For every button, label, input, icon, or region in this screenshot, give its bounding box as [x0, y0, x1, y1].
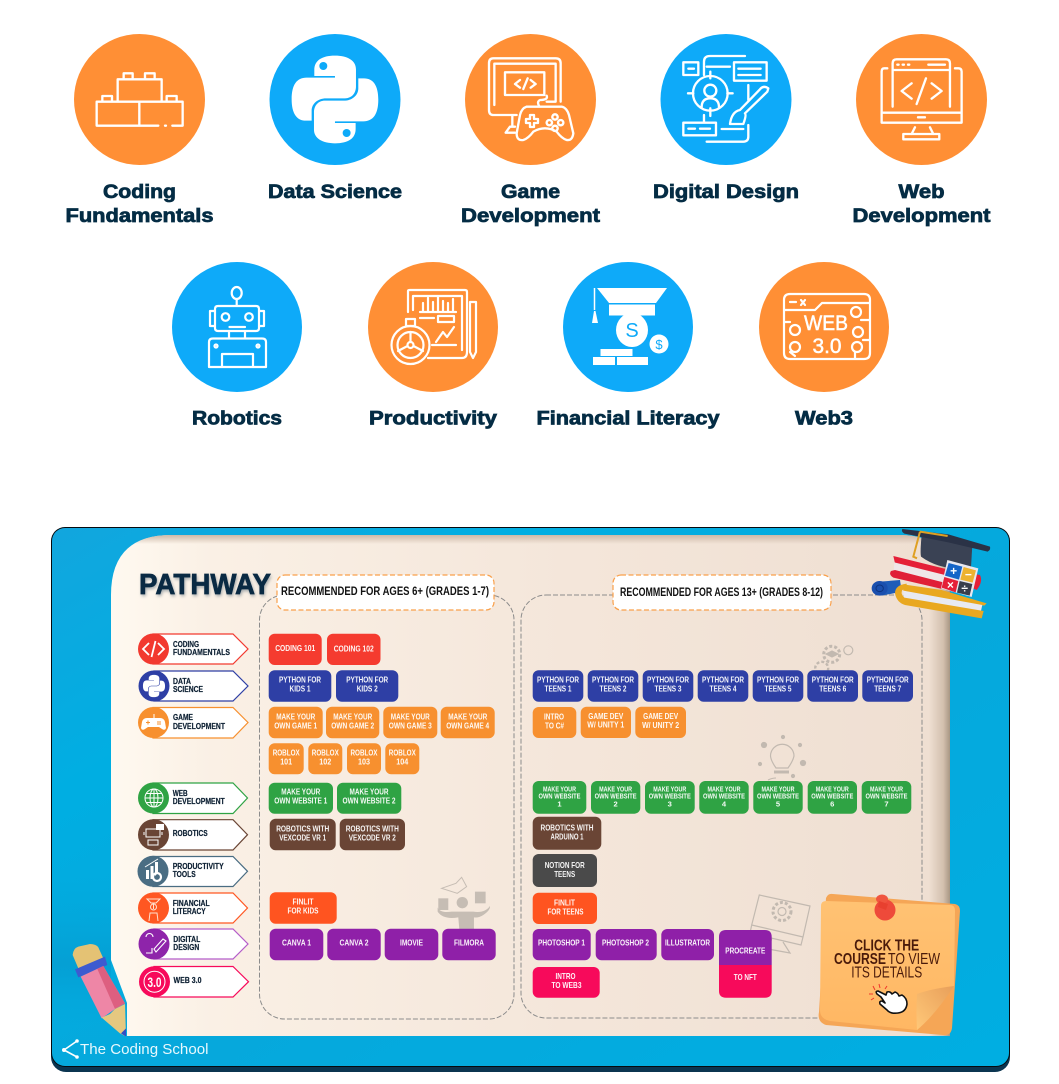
course: Make Your Own Game 2: OWN GAME 2: [331, 720, 374, 730]
course: Python for Teens 1: [533, 670, 583, 702]
icon: graduation cap and coins: [592, 288, 668, 365]
course: Canva 1: CANVA 1: [282, 938, 311, 948]
course: Roblox 102: [308, 743, 342, 774]
course: Make Your Own Website 1 (teens): OWN WEBSITE: [538, 792, 580, 801]
course: Roblox 104: [385, 743, 419, 774]
course: Make Your Own Game 2: [326, 707, 379, 738]
course: Coding 102: [327, 634, 380, 665]
group frame: ages 6+: [260, 595, 514, 1019]
legend: game development: GAME: [173, 713, 194, 722]
icon: robot: [209, 287, 266, 367]
call to action text: TO VIEW: [888, 951, 941, 968]
course: Roblox 103: 103: [358, 757, 370, 767]
icon: graduation cap and coins: S: [625, 320, 639, 342]
course: Make Your Own Website 2: [337, 783, 401, 814]
course: Roblox 104: ROBLOX: [389, 748, 416, 758]
heading: ages 6+: RECOMMENDED FOR AGES 6+ (GRADES 1-7): [281, 584, 489, 598]
course: Python for Teens 1: TEENS 1: [544, 684, 572, 694]
course: Roblox 102: 102: [319, 757, 332, 767]
course: Make Your Own Game 3: [383, 707, 437, 738]
course: Canva 2: [327, 929, 381, 960]
course: Make Your Own Website 7 (teens): [862, 781, 911, 814]
course: Make Your Own Website 5 (teens): MAKE YOUR: [762, 784, 795, 793]
label: Web: [898, 182, 944, 203]
course: Illustrator: ILLUSTRATOR: [665, 938, 710, 948]
course: Make Your Own Website 2: MAKE YOUR: [350, 787, 388, 797]
course: Python for Kids 1: [269, 670, 331, 702]
logo: The Coding School: The Coding School: [80, 1041, 208, 1058]
course: Make Your Own Game 1: OWN GAME 1: [274, 720, 317, 730]
category: Web3: [759, 262, 889, 430]
icon: web 3.0 window: WEB: [804, 312, 848, 335]
calculator: ×: [947, 578, 954, 592]
course: Make Your Own Website 2 (teens): [591, 781, 640, 814]
scroll: [872, 580, 902, 596]
course: Python for Teens 7: TEENS 7: [874, 684, 901, 694]
label: Web3: [795, 408, 853, 430]
legend: web development: DEVELOPMENT: [173, 797, 225, 806]
legend: coding fundamentals: CODING: [173, 640, 199, 649]
course: Robotics with VEXcode VR 1: ROBOTICS WITH: [276, 823, 329, 833]
legend: productivity tools: PRODUCTIVITY: [173, 862, 224, 871]
course: Make Your Own Website 4 (teens): MAKE YOUR: [708, 784, 741, 793]
course: Make Your Own Website 7 (teens): OWN WEBSITE: [866, 792, 908, 801]
course: Roblox 102: ROBLOX: [312, 748, 339, 758]
course: Robotics with Arduino 1: ARDUINO 1: [550, 831, 584, 841]
course: Filmora: FILMORA: [454, 938, 484, 948]
course: Python for Teens 3: [643, 670, 693, 702]
course: Intro to C#: INTRO: [544, 712, 564, 722]
course: Make Your Own Website 4 (teens): OWN WEBSITE: [703, 792, 745, 801]
course: Intro to Web3: TO WEB3: [552, 980, 582, 990]
course: Procreate to NFT: PROCREATE: [725, 945, 766, 955]
course: Make Your Own Website 4 (teens): [699, 781, 749, 814]
label: [66, 182, 214, 227]
watermark: light bulb: [758, 736, 806, 780]
course: Make Your Own Website 1 (teens): [533, 781, 586, 814]
label: [852, 182, 991, 227]
yellow book: [895, 584, 987, 618]
course: Python for Teens 6: TEENS 6: [819, 684, 846, 694]
category: Game Development: [461, 34, 601, 227]
course: Python for Teens 4: [698, 670, 748, 702]
course: Make Your Own Website 1: MAKE YOUR: [281, 787, 320, 797]
icon: monitor and controller: [489, 58, 573, 140]
course: Robotics with Arduino 1: [533, 817, 601, 850]
course: Make Your Own Website 1: [269, 783, 333, 814]
course: Make Your Own Game 1: MAKE YOUR: [276, 712, 315, 722]
course: Make Your Own Website 7 (teens): MAKE YOUR: [870, 784, 903, 793]
category: Coding Fundamentals: [66, 34, 214, 227]
course: Make Your Own Game 3: MAKE YOUR: [391, 712, 430, 722]
course: Make Your Own Game 3: OWN GAME 3: [389, 720, 432, 730]
icon: pointing hand: [869, 984, 907, 1013]
course: Game Dev with Unity 2: W/ UNITY 2: [642, 720, 679, 730]
category: Digital Design: [653, 34, 799, 203]
course: FinLit for Teens: FINLIT: [554, 897, 576, 907]
label: Financial Literacy: [536, 408, 720, 430]
course: Procreate to NFT: [719, 930, 772, 998]
course: Intro to Web3: [533, 967, 600, 998]
course: Canva 2: CANVA 2: [340, 938, 369, 948]
legend: digital design: [138, 928, 248, 960]
category: Web Development: [852, 34, 991, 227]
course: Notion for Teens: [533, 854, 597, 887]
course: Make Your Own Website 3 (teens): MAKE YOUR: [653, 784, 687, 793]
red books: [890, 556, 981, 590]
course: Robotics with VEXcode VR 1: VEXCODE VR 1: [279, 832, 326, 842]
course: Python for Kids 1: KIDS 1: [290, 684, 311, 694]
course: Python for Teens 5: [753, 670, 803, 702]
course: Make Your Own Website 1 (teens): 1: [557, 799, 562, 808]
course: Python for Teens 5: TEENS 5: [764, 684, 792, 694]
course: Game Dev with Unity 2: GAME DEV: [643, 711, 678, 721]
course: Photoshop 2: [596, 929, 657, 960]
course: Python for Kids 2: PYTHON FOR: [346, 675, 388, 685]
label: Development: [461, 206, 601, 227]
course: Notion for Teens: TEENS: [554, 869, 575, 879]
label: [461, 182, 601, 227]
panel: pathway: [51, 527, 1010, 1072]
label: Digital Design: [653, 182, 799, 203]
course: iMovie: [385, 929, 438, 960]
course: Make Your Own Website 5 (teens): OWN WEBSITE: [757, 792, 799, 801]
icon: stopwatch and report: [392, 290, 476, 364]
icon: graduation cap and coins: $: [655, 337, 663, 352]
course: Robotics with VEXcode VR 1: [270, 819, 336, 850]
course: Make Your Own Website 2 (teens): 2: [613, 799, 618, 808]
icon: desktop with code: [882, 59, 962, 139]
course: Make Your Own Website 1: OWN WEBSITE 1: [274, 796, 328, 806]
title: PATHWAY: [140, 571, 272, 603]
legend: game development: DEVELOPMENT: [173, 722, 225, 731]
legend: productivity tools: [138, 856, 248, 887]
paper sheet: [111, 535, 950, 1036]
course: Make Your Own Website 1 (teens): MAKE YOUR: [543, 784, 576, 793]
course: Illustrator: [661, 929, 714, 960]
legend: robotics: [138, 819, 248, 850]
course: Roblox 104: 104: [396, 757, 409, 767]
watermark: gears: [815, 646, 853, 675]
course: Make Your Own Website 2 (teens): MAKE YOUR: [599, 784, 632, 793]
legend: data science: SCIENCE: [173, 685, 204, 694]
category: Productivity: [368, 262, 498, 430]
course: Make Your Own Game 4: [441, 707, 495, 738]
illustration: books, cap and calculator: [872, 529, 990, 618]
pin: [874, 894, 896, 920]
icon: web 3.0 window: [784, 294, 870, 359]
course: Make Your Own Website 3 (teens): 3: [668, 799, 672, 808]
course: Canva 1: [270, 929, 323, 960]
heading: ages 13+: RECOMMENDED FOR AGES 13+ (GRADES 8-12): [620, 585, 823, 599]
label: Data Science: [268, 182, 402, 203]
icon: web 3.0 window: 3.0: [812, 335, 842, 358]
course: Make Your Own Website 4 (teens): 4: [722, 799, 727, 808]
legend: web 3.0: [139, 966, 248, 997]
watermark: juggling person: [438, 877, 490, 929]
course: Game Dev with Unity 1: W/ UNITY 1: [587, 720, 625, 730]
course: Robotics with VEXcode VR 2: VEXCODE VR 2: [349, 832, 396, 842]
legend: financial literacy: FINANCIAL: [173, 899, 210, 908]
course: Make Your Own Website 6 (teens): OWN WEBSITE: [811, 792, 853, 801]
label: Game: [501, 182, 560, 203]
course: Python for Teens 2: PYTHON FOR: [592, 675, 634, 685]
calculator: [941, 560, 978, 597]
legend: data science: DATA: [173, 677, 191, 686]
call to action text: CLICK THE: [854, 938, 919, 955]
course: Make Your Own Website 5 (teens): 5: [776, 799, 781, 808]
course: Roblox 103: ROBLOX: [350, 748, 378, 758]
illustration: pencil: [73, 944, 126, 1037]
legend: web 3.0: 3.0: [148, 974, 162, 990]
heading: ages 13+: [613, 575, 831, 610]
course: Python for Teens 4: PYTHON FOR: [702, 675, 744, 685]
course: Game Dev with Unity 1: [581, 707, 631, 738]
calculator: ÷: [961, 581, 968, 595]
course: Robotics with Arduino 1: ROBOTICS WITH: [540, 822, 594, 832]
course: Procreate to NFT: TO NFT: [734, 972, 757, 982]
course: Game Dev with Unity 1: GAME DEV: [588, 711, 624, 721]
course: FinLit for Kids: FOR KIDS: [288, 906, 319, 916]
icon: python logo: [292, 56, 378, 143]
course: Filmora: [442, 929, 496, 960]
label: Robotics: [192, 408, 282, 430]
label: Productivity: [369, 408, 497, 430]
sticky note callout: [819, 894, 960, 1035]
course: Make Your Own Website 2: OWN WEBSITE 2: [342, 796, 396, 806]
label: Coding: [103, 182, 176, 203]
course: Robotics with VEXcode VR 2: ROBOTICS WITH: [346, 823, 399, 833]
call to action text: ITS DETAILS: [851, 965, 922, 982]
calculator: −: [965, 568, 972, 582]
course: Python for Kids 1: PYTHON FOR: [279, 675, 321, 685]
heading: ages 6+: [277, 575, 494, 610]
legend: financial literacy: [138, 892, 248, 924]
course: FinLit for Kids: [270, 892, 337, 924]
course: Make Your Own Website 3 (teens): [645, 781, 695, 814]
course: Intro to Web3: INTRO: [556, 971, 576, 981]
course: Python for Kids 2: [336, 670, 398, 702]
course: Game Dev with Unity 2: [635, 707, 686, 738]
course: Python for Teens 1: PYTHON FOR: [537, 675, 579, 685]
course: Make Your Own Website 6 (teens): [808, 781, 857, 814]
legend: web development: [138, 782, 248, 814]
category: Financial Literacy: [536, 262, 720, 430]
course: Robotics with VEXcode VR 2: [340, 819, 405, 850]
call to action text: [834, 938, 941, 982]
course: Make Your Own Game 1: [269, 707, 323, 738]
calculator: +: [950, 564, 957, 578]
legend: game development: [138, 707, 248, 738]
legend: financial literacy: LITERACY: [173, 907, 206, 916]
course: Python for Teens 6: [807, 670, 858, 702]
course: Make Your Own Website 6 (teens): 6: [830, 799, 834, 808]
course: Coding 102: CODING 102: [334, 643, 374, 653]
course: Python for Teens 5: PYTHON FOR: [757, 675, 799, 685]
course: iMovie: IMOVIE: [400, 938, 423, 948]
course: Make Your Own Game 4: MAKE YOUR: [448, 712, 487, 722]
course: Make Your Own Website 5 (teens): [753, 781, 803, 814]
course: Roblox 103: [347, 743, 381, 774]
course: Make Your Own Website 3 (teens): OWN WEBSITE: [649, 792, 691, 801]
course: Python for Teens 2: TEENS 2: [600, 684, 627, 694]
course: Intro to C#: [533, 707, 576, 738]
course: Roblox 101: 101: [280, 757, 292, 767]
course: Python for Teens 2: [588, 670, 638, 702]
course: Photoshop 1: PHOTOSHOP 1: [538, 938, 585, 948]
legend: digital design: DIGITAL: [173, 935, 200, 944]
group frame: ages 13+: [521, 595, 922, 1018]
legend: robotics: ROBOTICS: [173, 829, 208, 838]
course: Intro to C#: TO C#: [545, 721, 564, 731]
label: Development: [852, 206, 991, 227]
course: Python for Teens 7: PYTHON FOR: [867, 675, 909, 685]
course: Photoshop 2: PHOTOSHOP 2: [602, 938, 649, 948]
course: Python for Teens 4: TEENS 4: [710, 684, 737, 694]
legend: web development: WEB: [173, 789, 188, 798]
course: Make Your Own Website 7 (teens): 7: [884, 799, 889, 808]
legend: web 3.0: WEB 3.0: [174, 976, 202, 985]
call to action text: COURSE: [834, 951, 886, 968]
legend: digital design: DESIGN: [173, 943, 199, 952]
course: Make Your Own Website 6 (teens): MAKE YOUR: [816, 784, 849, 793]
course: Python for Teens 7: [862, 670, 913, 702]
category: Data Science: [268, 34, 402, 203]
course: Photoshop 1: [533, 929, 591, 960]
course: Notion for Teens: NOTION FOR: [545, 860, 585, 870]
legend: productivity tools: TOOLS: [173, 870, 196, 879]
course: Python for Teens 3: TEENS 3: [654, 684, 682, 694]
course: Make Your Own Game 4: OWN GAME 4: [446, 720, 489, 730]
course: Python for Teens 3: PYTHON FOR: [647, 675, 689, 685]
course: Coding 101: [269, 634, 322, 665]
course: Python for Teens 6: PYTHON FOR: [812, 675, 854, 685]
course: Coding 101: CODING 101: [275, 643, 315, 653]
course: FinLit for Teens: [533, 893, 597, 924]
course: Python for Kids 2: KIDS 2: [357, 684, 378, 694]
title: PATHWAY: [139, 569, 271, 601]
course: FinLit for Kids: FINLIT: [292, 897, 314, 907]
legend: coding fundamentals: FUNDAMENTALS: [173, 648, 231, 657]
icon: building bricks: [97, 73, 183, 126]
course: Roblox 101: ROBLOX: [273, 748, 300, 758]
graduation cap: [902, 529, 990, 569]
legend: data science: [138, 670, 248, 702]
course: Make Your Own Website 2 (teens): OWN WEBSITE: [595, 792, 637, 801]
legend: coding fundamentals: [138, 634, 248, 664]
category: Robotics: [172, 262, 302, 430]
icon: target, brush and panels: [683, 56, 768, 142]
label: Fundamentals: [66, 206, 214, 227]
watermark: monitor with gear: [750, 895, 810, 953]
course: Roblox 101: [269, 743, 304, 774]
course: Make Your Own Game 2: MAKE YOUR: [333, 712, 372, 722]
course: FinLit for Teens: FOR TEENS: [548, 906, 584, 916]
